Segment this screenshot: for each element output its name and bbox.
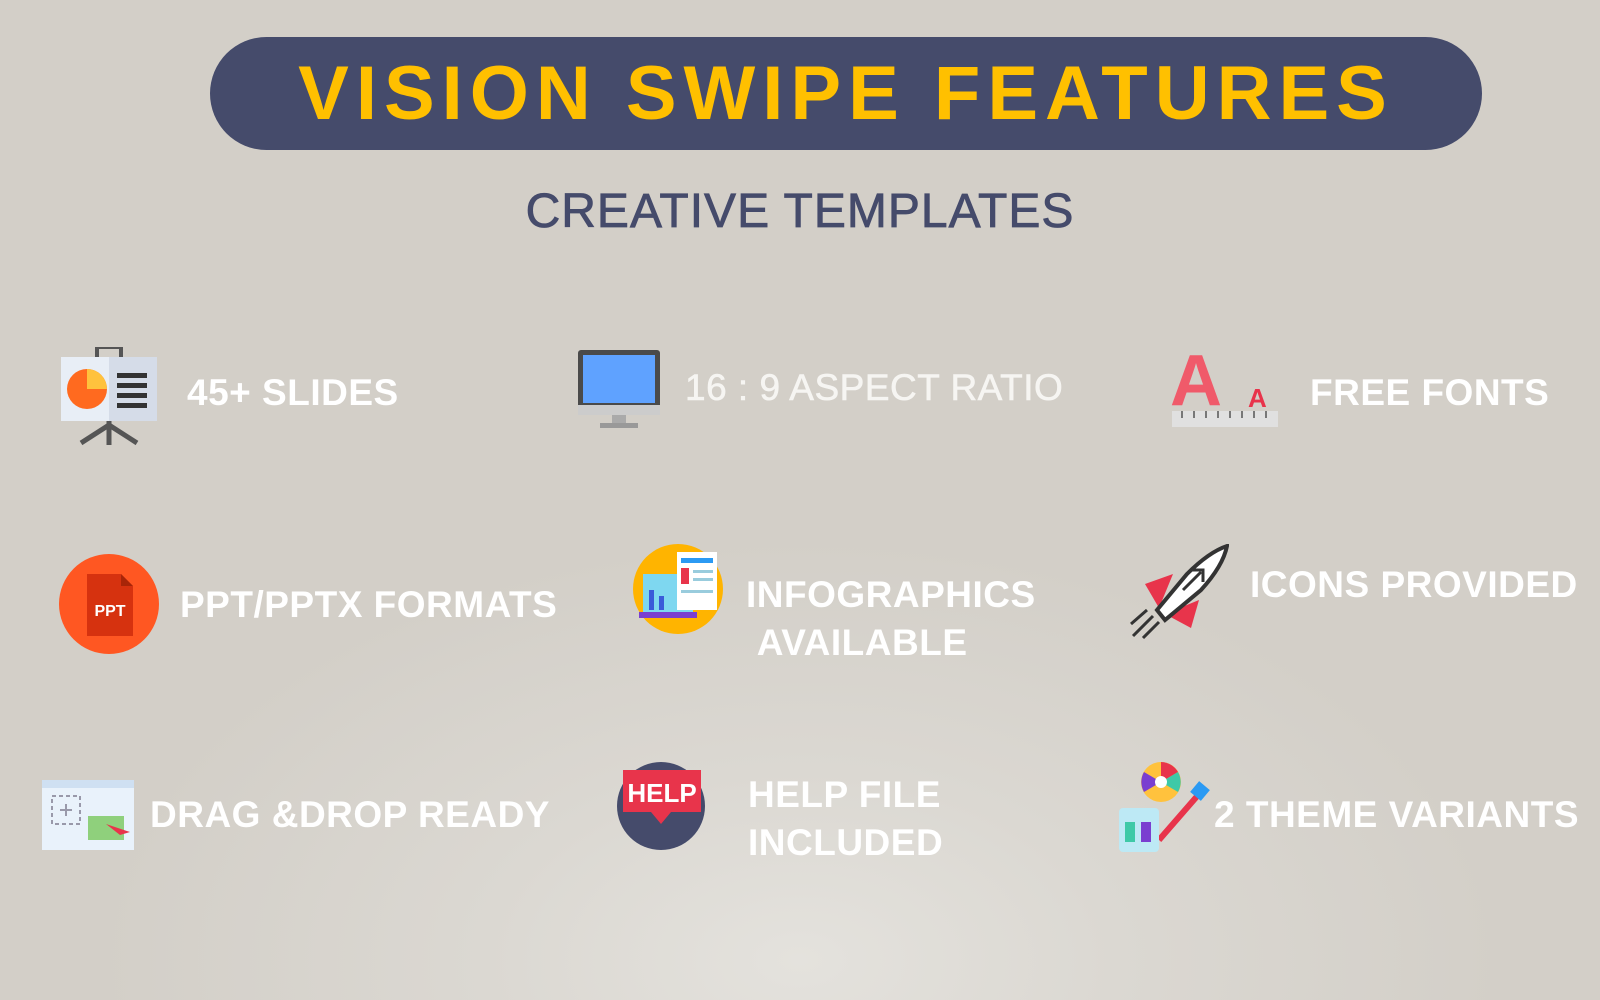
- icon: help: HELP: [627, 778, 697, 808]
- icon: rocket: [1130, 544, 1229, 639]
- icon: ppt: PPT: [94, 603, 126, 620]
- icon: presentation board: [61, 347, 157, 446]
- icon: drag drop: [42, 780, 134, 850]
- icon: fonts: [1170, 347, 1278, 427]
- text: aspect ratio: 16 : 9 ASPECT RATIO: [685, 367, 1063, 408]
- text: infographics available: [746, 574, 1036, 663]
- text: free fonts: FREE FONTS: [1310, 372, 1549, 413]
- icon: fonts: A: [1248, 383, 1267, 413]
- text: help file: [748, 774, 943, 863]
- icon: ppt: [59, 554, 159, 654]
- subtitle: CREATIVE TEMPLATES: [526, 185, 1074, 238]
- text: theme variants: 2 THEME VARIANTS: [1214, 794, 1579, 835]
- icon: theme: [1119, 762, 1210, 852]
- text: infographics available: AVAILABLE: [757, 622, 968, 663]
- text: 45+ slides: 45+ SLIDES: [187, 372, 399, 413]
- icon: infographics: [633, 544, 723, 634]
- title banner: [210, 37, 1482, 150]
- text: help file: HELP FILE: [748, 774, 941, 815]
- text: ppt formats: PPT/PPTX FORMATS: [180, 584, 557, 625]
- text: infographics available: INFOGRAPHICS: [746, 574, 1036, 615]
- text: help file: INCLUDED: [748, 822, 943, 863]
- text: icons provided: ICONS PROVIDED: [1250, 564, 1578, 605]
- icon: help: [617, 762, 705, 850]
- title banner: VISION SWIPE FEATURES: [298, 51, 1394, 136]
- icon: monitor: [578, 350, 660, 428]
- text: drag drop: DRAG &DROP READY: [150, 794, 550, 835]
